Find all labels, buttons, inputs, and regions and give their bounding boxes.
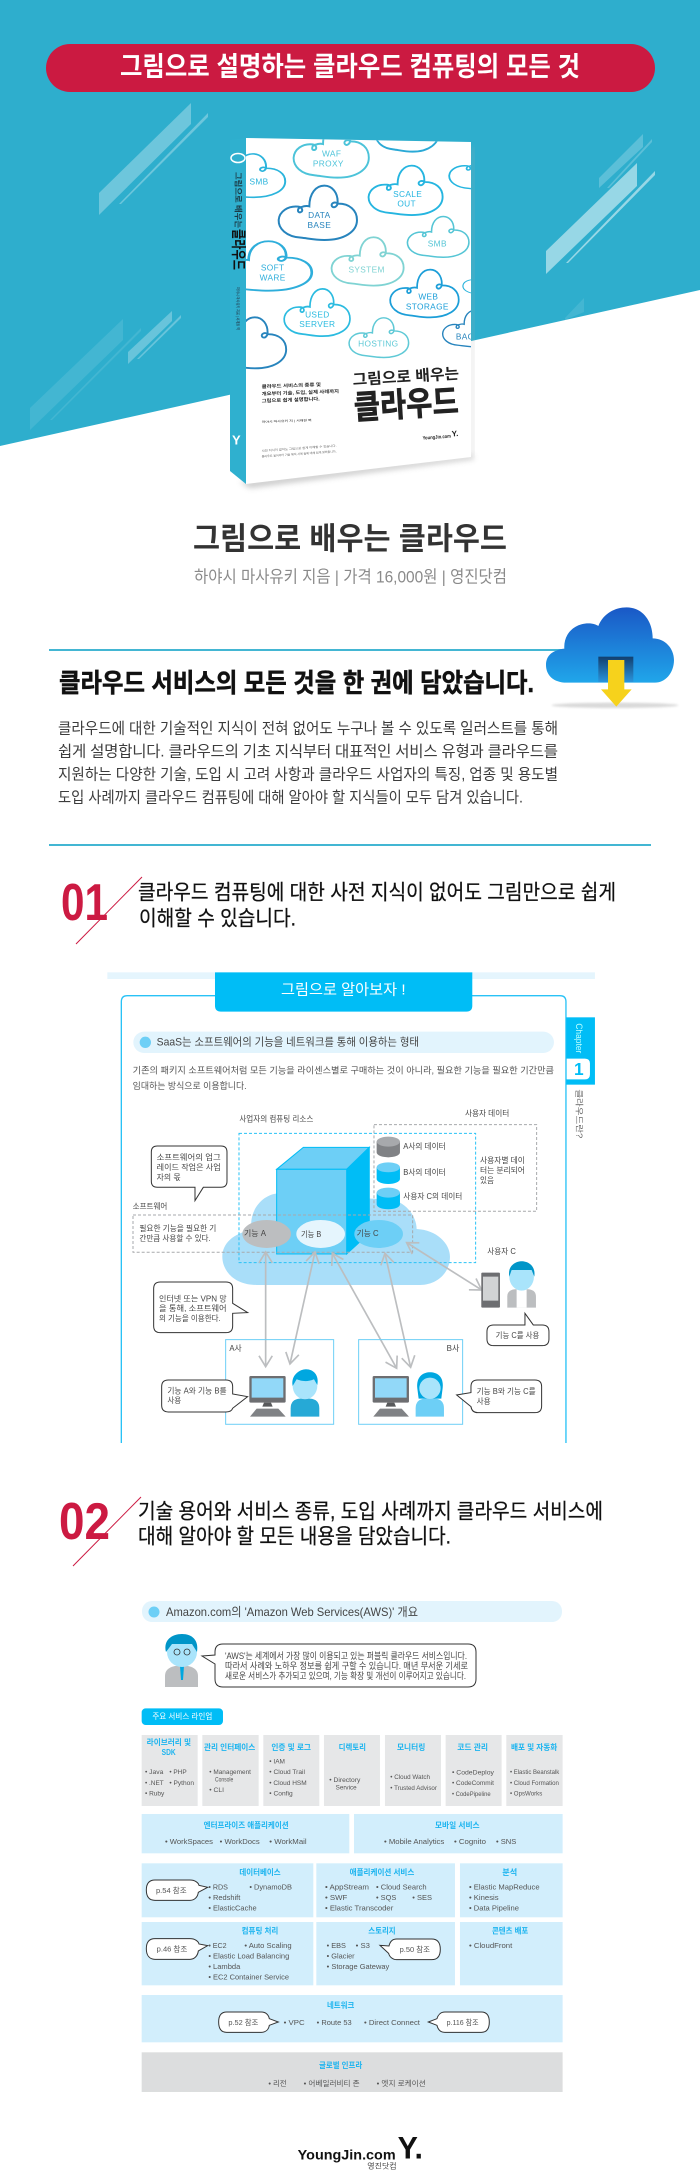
cover clouds: HOSTING <box>358 338 398 348</box>
publisher logo: Y. <box>398 2130 423 2165</box>
database <box>142 1863 313 1917</box>
network: • Route 53 <box>317 2018 352 2027</box>
book spine: Y <box>232 432 241 448</box>
data cylinders <box>377 1137 400 1209</box>
callout: functions B and C <box>457 1380 542 1413</box>
mobile services: • Mobile Analytics <box>384 1837 444 1846</box>
compute: 컴퓨팅 처리 <box>242 1925 278 1935</box>
cover title: 그림으로 쉽게 설명합니다. <box>262 395 320 404</box>
monitoring column <box>385 1735 441 1806</box>
cover clouds: DATA <box>308 210 331 220</box>
AWS service lineup chart <box>142 1708 563 1917</box>
function ellipses: 기능 B <box>301 1230 321 1239</box>
panel: SaaS illustration <box>107 972 595 1443</box>
database: • Redshift <box>208 1893 241 1902</box>
database: • ElasticCache <box>208 1903 257 1912</box>
callout: internet: 의 기능을 이용한다. <box>159 1313 221 1323</box>
cover title: 클라우드 <box>353 384 460 427</box>
mobile services: 모바일 서비스 <box>435 1820 480 1830</box>
auth and log column: 인증 및 로그 <box>271 1742 311 1752</box>
library and SDK column <box>142 1735 198 1806</box>
global infrastructure <box>142 2052 563 2092</box>
cover title: 사전 지식이 없어도 그림으로 쉽게 이해할 수 있습니다. <box>261 443 337 453</box>
code management column: • CodePipeline <box>452 1791 491 1798</box>
global infrastructure: 글로벌 인프라 <box>319 2060 363 2070</box>
auth and log column: • Config <box>269 1790 293 1797</box>
auth and log column: • Cloud Trail <box>269 1769 305 1776</box>
deployment column: 배포 및 자동화 <box>511 1742 558 1752</box>
diagram labels: 사용자 C <box>487 1247 516 1256</box>
intro paragraph <box>58 720 558 806</box>
book spine: 하야시 마사유키 지음 | 서재원 역 <box>236 287 242 330</box>
library and SDK column: 라이브러리 및 <box>147 1737 191 1747</box>
enterprise applications: 엔터프라이즈 애플리케이션 <box>204 1820 289 1830</box>
publisher logo: 영진닷컴 <box>367 2160 397 2170</box>
compute: • Elastic Load Balancing <box>208 1951 289 1960</box>
global infrastructure: • 어베일러비티 존 <box>304 2078 360 2088</box>
storage: • Storage Gateway <box>327 1962 389 1971</box>
diagram labels <box>133 1108 525 1353</box>
enterprise applications: • WorkMail <box>269 1837 307 1846</box>
callout: upgrade: 소프트웨어의 업그 <box>157 1152 221 1162</box>
callout: upgrade: 자의 몫 <box>157 1172 181 1182</box>
compute: • EC2 Container Service <box>208 1972 289 1981</box>
storage: • EBS <box>327 1941 346 1950</box>
diagram labels: A사의 데이터 <box>403 1141 446 1151</box>
auth and log column <box>263 1735 319 1806</box>
storage: • Glacier <box>327 1951 355 1960</box>
intro paragraph: 클라우드에 대한 기술적인 지식이 전혀 없어도 누구나 볼 수 있도록 일러스트를 통해 <box>58 720 558 738</box>
function ellipses: 기능 A <box>244 1229 267 1238</box>
analytics: • Kinesis <box>469 1893 499 1902</box>
library and SDK column: • Python <box>169 1780 194 1787</box>
library and SDK column: • PHP <box>169 1769 187 1776</box>
network <box>142 1995 563 2042</box>
diagram labels: 사업자의 컴퓨팅 리소스 <box>239 1113 313 1123</box>
diagram labels: 사용자 데이터 <box>465 1108 509 1118</box>
application services: • SWF <box>325 1893 348 1902</box>
directory column: Service <box>336 1784 357 1791</box>
cover title: Y. <box>451 429 459 438</box>
diagram labels: B사 <box>447 1344 460 1353</box>
cover title <box>261 366 460 459</box>
function ellipses: 기능 C <box>357 1229 379 1238</box>
speech bubble: 'AWS'는 세계에서 가장 많이 이용되고 있는 퍼블릭 클라우드 서비스입니다. <box>225 1650 467 1661</box>
deployment column: • Cloud Formation <box>510 1780 559 1787</box>
code management column <box>446 1735 502 1806</box>
intro heading: 클라우드 서비스의 모든 것을 한 권에 담았습니다. <box>59 668 534 698</box>
monitoring column: 모니터링 <box>397 1742 425 1752</box>
speech bubble <box>202 1644 476 1687</box>
network: p.52 참조 <box>228 2017 258 2027</box>
enterprise applications <box>142 1814 349 1853</box>
book spine <box>230 138 246 484</box>
teal diagonal background <box>0 0 700 446</box>
network: • VPC <box>284 2018 305 2027</box>
top divider <box>49 649 569 651</box>
application services: • Cloud Search <box>376 1882 427 1891</box>
publisher logo <box>298 2130 423 2170</box>
deployment column: • OpsWorks <box>510 1790 542 1797</box>
callout: functions A and B <box>162 1380 248 1412</box>
cover clouds: OUT <box>397 198 416 208</box>
callout: upgrade <box>151 1146 227 1201</box>
diagram labels: 터는 분리되어 <box>480 1165 525 1175</box>
AWS overview bar: Amazon.com의 'Amazon Web Services(AWS)' 개요 <box>166 1605 418 1619</box>
cover clouds: SYSTEM <box>349 264 385 274</box>
code management column: • CodeDeploy <box>452 1769 495 1776</box>
cover clouds: STORAGE <box>406 302 449 312</box>
book cover <box>230 138 475 490</box>
database: p.54 참조 <box>156 1885 187 1895</box>
cover clouds: WARE <box>260 273 286 283</box>
application services: • SQS <box>376 1893 396 1902</box>
cover title: 하야시 마사유키 저 | 서재원 역 <box>262 417 312 424</box>
intro paragraph: 도입 사례까지 클라우드 컴퓨팅에 대해 알아야 할 지식들이 모두 담겨 있습니다. <box>58 788 523 806</box>
book spine: 클라우드 <box>230 229 246 270</box>
SaaS description: 임대하는 방식으로 이용합니다. <box>133 1080 247 1091</box>
cover clouds: SERVER <box>299 319 335 329</box>
application services: • AppStream <box>325 1882 369 1891</box>
icon: cloud download <box>546 607 678 708</box>
speech bubble: 새로운 서비스가 추가되고 있으며, 기능 확장 및 개선이 이루어지고 있습니다. <box>225 1670 466 1681</box>
management interface column: • Management <box>209 1769 251 1776</box>
monitoring column: • Trusted Advisor <box>390 1785 437 1792</box>
cover clouds: PROXY <box>313 158 344 168</box>
lineup button: 주요 서비스 라인업 <box>152 1711 212 1721</box>
icon: presenter <box>165 1634 198 1687</box>
application services: • SES <box>412 1893 432 1902</box>
analytics <box>460 1863 563 1917</box>
SaaS description <box>133 1065 554 1091</box>
auth and log column: • Cloud HSM <box>269 1780 307 1787</box>
chapter side tab: Chapter <box>574 1023 584 1053</box>
deployment column <box>506 1735 563 1806</box>
directory column <box>324 1735 380 1806</box>
diagram labels: 사용자 C의 데이터 <box>403 1191 462 1201</box>
content delivery: • CloudFront <box>469 1941 513 1950</box>
book meta line: 하야시 마사유키 지음 | 가격 16,000원 | 영진닷컴 <box>194 568 507 586</box>
callout: internet: 인터넷 또는 VPN 망 <box>159 1293 227 1303</box>
compute: • Auto Scaling <box>244 1941 292 1950</box>
speech bubble: 따라서 사례와 노하우 정보를 쉽게 구할 수 있습니다. 매년 무서운 기세로 <box>225 1660 468 1671</box>
diagram labels: B사의 데이터 <box>403 1167 446 1177</box>
cover clouds: WEB <box>418 292 438 302</box>
enterprise applications: • WorkSpaces <box>165 1837 213 1846</box>
analytics: 분석 <box>502 1867 517 1877</box>
storage: • S3 <box>356 1941 370 1950</box>
content delivery: 콘텐츠 배포 <box>492 1925 529 1935</box>
global infrastructure: • 엣지 로케이션 <box>377 2078 426 2088</box>
AWS overview bar <box>142 1601 562 1622</box>
network: 네트워크 <box>327 2000 354 2010</box>
callout: functions A and B: 기능 A와 기능 B를 <box>167 1385 227 1395</box>
section 01 heading <box>138 882 616 930</box>
cover clouds: WAF <box>322 148 341 158</box>
callout: function C <box>487 1313 549 1346</box>
compute: • Lambda <box>208 1962 241 1971</box>
network: • Direct Connect <box>364 2018 421 2027</box>
cover clouds: SMB <box>428 238 447 248</box>
application services <box>316 1863 455 1917</box>
analytics: • Data Pipeline <box>469 1903 519 1912</box>
database: 데이터베이스 <box>239 1867 281 1877</box>
library and SDK column: • Java <box>145 1769 164 1776</box>
bottom divider <box>49 844 651 846</box>
lineup button <box>142 1708 223 1725</box>
callout: internet: 을 통해, 소프트웨어 <box>159 1303 227 1313</box>
database: • DynamoDB <box>249 1882 292 1891</box>
AWS service lineup lower chart <box>142 1922 563 2170</box>
storage: 스토리지 <box>368 1926 396 1935</box>
application services: • Elastic Transcoder <box>325 1903 394 1912</box>
storage <box>316 1922 455 1985</box>
subheading bar <box>133 1032 554 1053</box>
server box <box>277 1147 369 1254</box>
mobile services <box>354 1814 563 1853</box>
callout: function C: 기능 C를 사용 <box>496 1331 539 1340</box>
application services: 애플리케이션 서비스 <box>350 1867 415 1877</box>
chapter side tab <box>566 1017 595 1139</box>
callout: functions B and C: 기능 B와 기능 C를 <box>477 1386 536 1396</box>
code management column: 코드 관리 <box>457 1742 488 1752</box>
section 01 number <box>61 874 142 944</box>
diagram labels: 간만큼 사용할 수 있다. <box>139 1233 211 1243</box>
library and SDK column: SDK <box>162 1748 176 1757</box>
callout: functions B and C: 사용 <box>477 1397 491 1406</box>
analytics: • Elastic MapReduce <box>469 1882 540 1891</box>
callout: upgrade: 레이드 작업은 사업 <box>157 1162 221 1172</box>
section 02 number <box>59 1493 141 1566</box>
diagram labels: 사용자별 데이 <box>480 1155 525 1165</box>
cover title: 개요부터 기술, 도입, 실제 사례까지 <box>262 388 339 397</box>
section 02 heading <box>138 1500 603 1548</box>
subheading bar: SaaS는 소프트웨어의 기능을 네트워크를 통해 이용하는 형태 <box>157 1035 419 1048</box>
cover clouds: BASE <box>308 220 331 230</box>
network: p.116 참조 <box>447 2017 479 2027</box>
callout: functions A and B: 사용 <box>167 1396 181 1405</box>
compute: p.46 참조 <box>157 1943 187 1953</box>
intro paragraph: 쉽게 설명합니다. 클라우드의 기초 지식부터 대표적인 서비스 유형과 클라우드를 <box>58 742 558 760</box>
enterprise applications: • WorkDocs <box>220 1837 260 1846</box>
section 02 heading: 기술 용어와 서비스 종류, 도입 사례까지 클라우드 서비스에 <box>138 1500 603 1524</box>
mobile services: • SNS <box>496 1837 516 1846</box>
book spine: 그림으로 배우는 <box>234 172 244 229</box>
diagram labels: 필요한 기능을 필요한 기 <box>139 1223 216 1233</box>
cover clouds <box>246 139 471 458</box>
section 01 number: 01 <box>61 874 108 932</box>
code management column: • CodeCommit <box>452 1780 494 1787</box>
deployment column: • Elastic Beanstalk <box>510 1769 560 1776</box>
cover clouds: SMB <box>249 177 269 187</box>
compute <box>142 1922 313 1985</box>
directory column: 디렉토리 <box>339 1742 366 1752</box>
company A box <box>226 1340 334 1424</box>
diagram labels: 소프트웨어 <box>133 1201 167 1211</box>
chapter side tab: 1 <box>574 1059 584 1079</box>
section 02 heading: 대해 알아야 할 모든 내용을 담았습니다. <box>138 1526 451 1548</box>
title banner: 그림으로 설명하는 클라우드 컴퓨팅의 모든 것 <box>120 52 580 82</box>
global infrastructure: • 리전 <box>268 2078 287 2088</box>
tab heading: 그림으로 알아보자 ! <box>281 982 406 999</box>
monitoring column: • Cloud Watch <box>390 1774 430 1781</box>
cover title: YoungJin.com <box>422 434 452 442</box>
library and SDK column: • Ruby <box>145 1790 165 1797</box>
diagram labels: 있음 <box>480 1175 494 1185</box>
company B box <box>359 1340 463 1424</box>
section 02 number: 02 <box>59 1493 110 1551</box>
cover clouds: USED <box>305 309 330 319</box>
tab heading <box>215 972 472 1012</box>
auth and log column: • IAM <box>269 1758 285 1765</box>
SaaS description: 기존의 패키지 소프트웨어처럼 모든 기능을 라이센스별로 구매하는 것이 아니라, 필요한 기능을 필요한 기간만큼 <box>133 1065 554 1076</box>
database: • RDS <box>208 1882 228 1891</box>
cover clouds: BAC <box>456 332 474 342</box>
directory column: • Directory <box>329 1777 361 1784</box>
management interface column: 관리 인터페이스 <box>204 1742 256 1752</box>
management interface column: Console <box>215 1776 234 1783</box>
dashed regions <box>133 1125 537 1263</box>
mobile services: • Cognito <box>454 1837 486 1846</box>
cover title: 클라우드 서비스의 종류 및 <box>262 381 321 390</box>
publisher logo: YoungJin.com <box>298 2146 396 2162</box>
cover title: 그림으로 배우는 <box>352 366 460 389</box>
book title: 그림으로 배우는 클라우드 <box>193 522 507 556</box>
library and SDK column: • .NET <box>145 1780 164 1787</box>
section 01 heading: 클라우드 컴퓨팅에 대한 사전 지식이 없어도 그림만으로 쉽게 <box>138 882 616 904</box>
cover clouds: SOFT <box>261 263 284 273</box>
content delivery <box>460 1922 563 1985</box>
callout: internet <box>154 1282 248 1333</box>
diagram labels: A사 <box>229 1344 242 1353</box>
user C figure <box>481 1261 536 1308</box>
compute: • EC2 <box>208 1941 227 1950</box>
management interface column <box>202 1735 259 1806</box>
management interface column: • CLI <box>209 1787 224 1794</box>
cover clouds: SCALE <box>393 189 422 199</box>
chapter side tab: 클라우드란? <box>574 1089 584 1139</box>
cover title: 클라우드 용어부터 기술 해석 사례 등에 대해 쉽게 알려줍니다. <box>261 448 337 459</box>
storage: p.50 참조 <box>400 1944 430 1954</box>
section 01 heading: 이해할 수 있습니다. <box>139 908 296 930</box>
arrows <box>266 1243 482 1368</box>
cloud backdrop <box>222 1193 450 1285</box>
function ellipses <box>242 1220 403 1248</box>
title banner <box>46 44 655 92</box>
intro paragraph: 지원하는 다양한 기술, 도입 시 고려 사항과 클라우드 사업자의 특징, 업종 및 용도별 <box>58 766 558 784</box>
